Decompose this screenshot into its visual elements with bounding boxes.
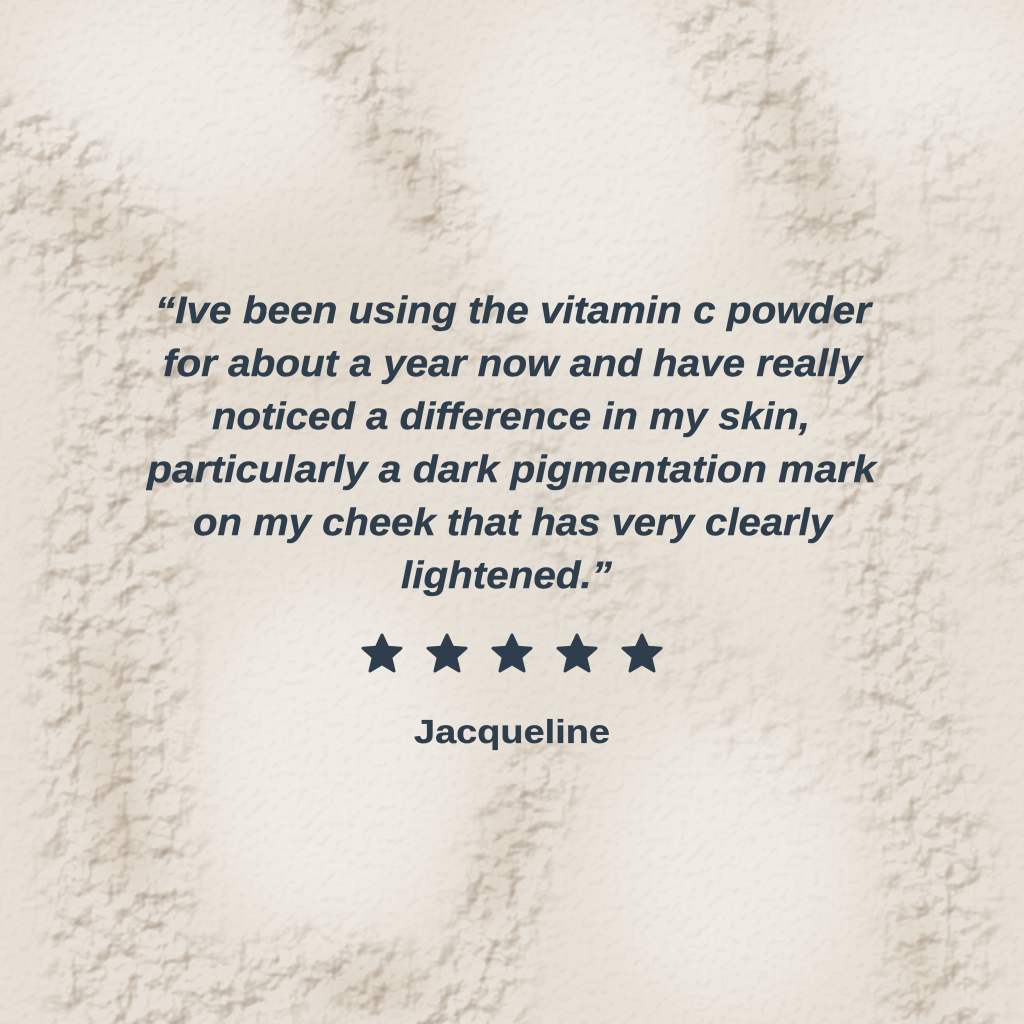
testimonial quote: “Ive been using the vitamin c powder <box>155 290 873 332</box>
testimonial quote: particularly a dark pigmentation mark <box>146 449 878 491</box>
five star rating <box>363 635 661 671</box>
testimonial quote <box>146 290 878 597</box>
testimonial quote: for about a year now and have really <box>163 343 864 385</box>
testimonial quote: on my cheek that has very clearly <box>193 502 834 544</box>
testimonial quote: noticed a difference in my skin, <box>212 396 810 438</box>
testimonial quote: lightened.” <box>401 555 612 597</box>
reviewer name: Jacqueline <box>414 713 610 750</box>
